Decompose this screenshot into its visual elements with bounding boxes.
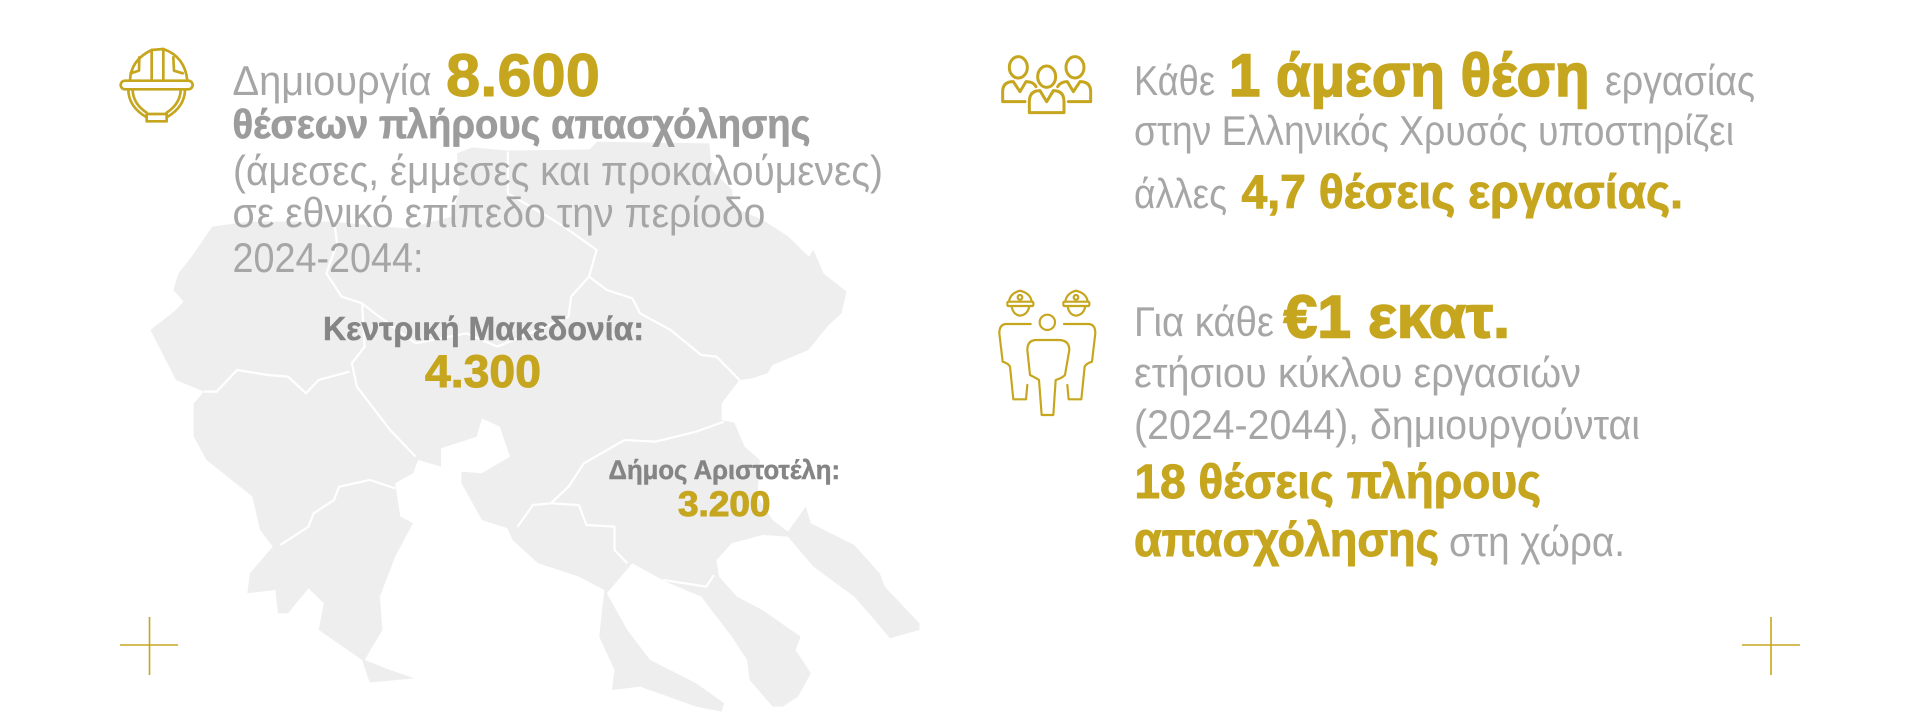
text block: 1 direct job supports 4,7 jobs: Κάθε — [1134, 57, 1215, 104]
text block: 8.600 jobs: 8.600 — [446, 42, 600, 109]
text block: for each €1 million, 18 jobs: στη χώρα. — [1449, 518, 1625, 565]
callout: Municipality of Aristotle 3.200: 3.200 — [678, 485, 770, 524]
text block: for each €1 million, 18 jobs: (2024-2044), δημιουργούνται — [1134, 401, 1640, 448]
text block: 8.600 jobs: θέσεων πλήρους απασχόλησης — [232, 101, 810, 147]
callout: Municipality of Aristotle 3.200 — [608, 455, 840, 524]
text block: 8.600 jobs: (άμεσες, έμμεσες και προκαλούμενες) — [233, 147, 883, 194]
text block: for each €1 million, 18 jobs: απασχόλησης — [1134, 514, 1439, 567]
icon: workers with hard hats — [999, 291, 1095, 415]
callout: Central Macedonia 4.300: 4.300 — [425, 346, 541, 397]
text block: 1 direct job supports 4,7 jobs: εργασίας — [1605, 57, 1755, 104]
text block: 1 direct job supports 4,7 jobs: στην Ελληνικός Χρυσός υποστηρίζει — [1134, 107, 1734, 154]
text block: for each €1 million, 18 jobs: 18 θέσεις πλήρους — [1134, 456, 1541, 509]
text block: 1 direct job supports 4,7 jobs: άλλες — [1134, 170, 1227, 217]
text block: 8.600 jobs: 2024-2044: — [232, 234, 424, 281]
crosshair mark right — [1742, 617, 1800, 675]
text block: 8.600 jobs: Δημιουργία — [232, 57, 432, 104]
map: Northern Greece regions — [150, 142, 919, 712]
text block: for each €1 million, 18 jobs: Για κάθε — [1134, 298, 1274, 345]
text block: 1 direct job supports 4,7 jobs — [1134, 42, 1755, 218]
text block: 1 direct job supports 4,7 jobs: 1 άμεση θέση — [1229, 42, 1590, 109]
text block: 8.600 jobs — [232, 42, 883, 281]
text block: for each €1 million, 18 jobs: €1 εκατ. — [1284, 284, 1510, 350]
text block: for each €1 million, 18 jobs: ετήσιου κύκλου εργασιών — [1134, 349, 1581, 396]
icon: group of three people — [1003, 57, 1091, 113]
text block: for each €1 million, 18 jobs — [1134, 284, 1640, 567]
crosshair mark left — [120, 617, 178, 675]
callout: Central Macedonia 4.300: Κεντρική Μακεδονία: — [323, 310, 644, 347]
icon: hard hat — [121, 49, 193, 121]
text block: 8.600 jobs: σε εθνικό επίπεδο την περίοδο — [232, 189, 766, 236]
text block: 1 direct job supports 4,7 jobs: 4,7 θέσεις εργασίας. — [1242, 165, 1683, 218]
callout: Municipality of Aristotle 3.200: Δήμος Αριστοτέλη: — [608, 455, 840, 485]
callout: Central Macedonia 4.300 — [323, 310, 644, 397]
